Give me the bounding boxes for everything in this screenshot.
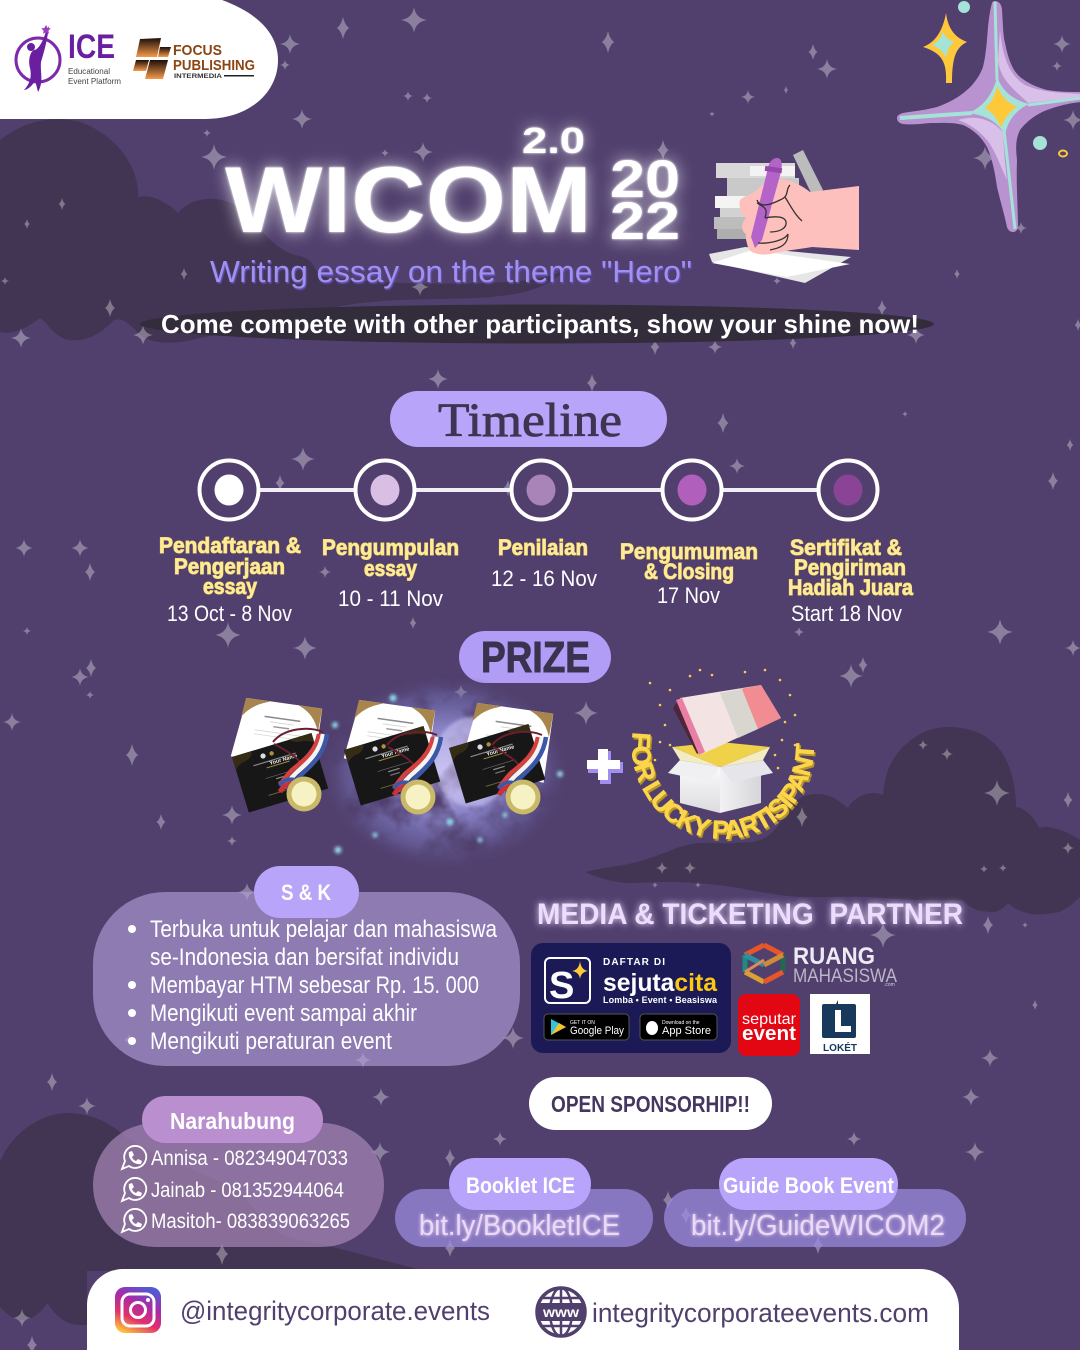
panel: guide book link: bit.ly/GuideWICOM2 [691, 1210, 945, 1242]
timeline item: Sertifikat: Pengiriman [794, 555, 906, 580]
panel: booklet link: bit.ly/BookletICE [419, 1210, 620, 1242]
partner card: sejutacita: sejutacita [603, 969, 718, 997]
prize: certificates and medal 2 [342, 699, 441, 814]
cloud: upper left [0, 119, 565, 343]
pill: Guide Book Event [719, 1158, 898, 1210]
timeline item: Pendaftaran: essay [203, 574, 258, 599]
title: WICOM 2.0 2022: 2.0 [522, 120, 585, 161]
timeline item: Pendaftaran: Pendaftaran & [159, 533, 301, 558]
pill: Narahubung: Narahubung [170, 1108, 295, 1134]
milestone 2 [356, 460, 414, 520]
decoration: big sparkle star [897, 1, 1080, 232]
Focus Publishing wordmark: PUBLISHING [173, 57, 255, 74]
illustration: gift box with money [649, 669, 796, 813]
icon: plus [587, 749, 623, 784]
timeline item: Sertifikat: Hadiah Juara [788, 575, 914, 600]
button: Google Play [544, 1014, 629, 1040]
partner card: sejutacita: DAFTAR DI [603, 957, 665, 968]
title: WICOM 2.0 2022: 22 [610, 192, 680, 251]
timeline item: Pengumpulan: essay [364, 556, 418, 581]
heading: Timeline: Timeline [438, 394, 622, 447]
subtitle: Writing essay on the theme "Hero" [210, 254, 692, 289]
terms list [128, 916, 498, 1055]
curved label: for lucky partisipant: FOR LUCKY PARTISIPANT [632, 733, 814, 840]
Focus Publishing wordmark: FOCUS [173, 42, 222, 59]
partner card: sejutacita: Lomba • Event • Beasiswa [603, 995, 718, 1005]
terms list: Terbuka untuk pelajar dan mahasiswa [150, 916, 498, 943]
panel: S&K terms [93, 866, 520, 1066]
timeline item: Pengumuman: Pengumuman [620, 539, 758, 564]
timeline item: Penilaian: 12 - 16 Nov [491, 566, 597, 591]
Focus Publishing wordmark: INTERMEDIA [174, 74, 223, 80]
icon: sejutacita S [545, 958, 590, 1007]
partner logo: Seputar Event: seputar [742, 1011, 797, 1028]
ICE wordmark: Event Platform [68, 77, 121, 86]
timeline item: Sertifikat: Sertifikat & [790, 535, 902, 560]
timeline item: Pengumpulan [322, 535, 459, 611]
callout: open sponsorship: OPEN SPONSORHIP!! [551, 1091, 750, 1117]
callout: open sponsorship [529, 1077, 772, 1130]
Focus Publishing wordmark [173, 42, 255, 80]
cloud: bottom left [0, 1113, 427, 1325]
footer panel [87, 1269, 959, 1350]
prize: certificates and medal 2: Your Name [381, 746, 410, 760]
terms list: se-Indonesia dan bersifat individu [150, 944, 459, 971]
contact: Jainab: Jainab - 081352944064 [151, 1179, 344, 1202]
milestone 3 [512, 460, 570, 520]
decoration: small yellow star [923, 13, 967, 83]
panel: booklet link [395, 1158, 653, 1247]
button: Google Play: Google Play [570, 1025, 624, 1037]
timeline chart [200, 460, 878, 520]
timeline item: Pengumuman: & Closing [644, 559, 734, 584]
pill: S & K: S & K [281, 880, 331, 905]
icon: Focus Publishing blocks [133, 38, 171, 79]
pill: Guide Book Event: Guide Book Event [723, 1173, 895, 1198]
logo panel: ICE and Focus Publishing [0, 0, 278, 119]
milestone 4 [662, 460, 722, 520]
timeline item: Pendaftaran: 13 Oct - 8 Nov [167, 601, 292, 626]
timeline item: Penilaian: Penilaian [498, 535, 588, 560]
icon: instagram [115, 1287, 161, 1333]
pill: Booklet ICE [449, 1158, 591, 1210]
title: WICOM 2.0 2022: WICOM [225, 147, 592, 252]
icon: ICE logo [16, 25, 60, 92]
partner card: sejutacita [531, 943, 731, 1053]
tagline band: Come compete with other participants, show your shine now! [161, 309, 919, 339]
ICE wordmark: Educational [68, 67, 110, 76]
pill: Booklet ICE: Booklet ICE [466, 1173, 575, 1198]
button: App Store: App Store [662, 1025, 711, 1037]
illustration: hand writing with books [709, 150, 859, 283]
icon: sejutacita S: S [549, 965, 574, 1007]
partner logo: Loket: LOKÉT [823, 1041, 857, 1054]
timeline item: Pendaftaran: Pengerjaan [174, 554, 285, 579]
nebula backdrop [320, 674, 570, 870]
contact: Annisa: Annisa - 082349047033 [151, 1147, 348, 1170]
timeline item: Sertifikat: Start 18 Nov [791, 601, 902, 626]
contact: Masitoh: Masitoh- 083839063265 [151, 1210, 350, 1233]
timeline item: Pendaftaran [159, 533, 301, 626]
milestone 5 [818, 460, 878, 520]
icon: globe www: www [542, 1304, 579, 1320]
partner logo: Seputar Event [738, 994, 800, 1056]
milestone 1 [200, 460, 258, 520]
curved label: for lucky partisipant: FOR LUCKY PARTISIPANT [634, 736, 816, 842]
heading: PRIZE: PRIZE [481, 633, 590, 682]
timeline item: Pengumpulan: 10 - 11 Nov [338, 586, 443, 611]
prize: certificates and medal 1: Your Name [269, 753, 298, 767]
terms list: Mengikuti peraturan event [150, 1028, 392, 1055]
pill: S & K [254, 866, 359, 918]
timeline item: Pengumuman: 17 Nov [657, 583, 720, 608]
prize: certificates and medal 3: Your Name [486, 744, 515, 758]
heading: Timeline [390, 391, 667, 447]
partner logo: Ruang Mahasiswa: .com [884, 982, 895, 988]
prize: certificates and medal 3 [449, 702, 553, 814]
button: Google Play: GET IT ON [570, 1020, 595, 1026]
terms list: Mengikuti event sampai akhir [150, 1000, 417, 1027]
button: App Store: Download on the [662, 1020, 700, 1026]
prize: certificates and medal 1 [229, 697, 328, 813]
partner logo: Ruang Mahasiswa: RUANG [793, 943, 875, 970]
cloud: right [585, 727, 1080, 914]
timeline item: Pengumpulan: Pengumpulan [322, 535, 459, 560]
timeline item: Pengumuman [620, 539, 758, 608]
title: WICOM 2.0 2022: 20 [610, 150, 680, 209]
partner logo: Seputar Event: event [742, 1023, 796, 1045]
website: integritycorporateevents.com [592, 1298, 929, 1328]
icon: globe www [537, 1288, 585, 1336]
panel: guide book link [664, 1158, 966, 1247]
timeline item: Sertifikat [788, 535, 914, 626]
title: WICOM 2.0 2022 [225, 120, 680, 252]
heading: media and ticketing partner: MEDIA & TICKETING PARTNER [537, 898, 963, 931]
pill: Narahubung [142, 1096, 323, 1143]
timeline item: Penilaian [491, 535, 597, 591]
button: App Store [640, 1014, 717, 1040]
ICE wordmark: ICE [68, 28, 115, 66]
decoration: dots [958, 1, 1067, 156]
partner logo: Ruang Mahasiswa [745, 943, 897, 988]
partner logo: Loket [810, 994, 870, 1054]
ICE wordmark [68, 28, 121, 86]
terms list: Membayar HTM sebesar Rp. 15. 000 [150, 972, 479, 999]
instagram handle: @integritycorporate.events [180, 1296, 490, 1326]
partner logo: Ruang Mahasiswa: MAHASISWA [793, 966, 897, 987]
panel: contacts [93, 1096, 384, 1247]
